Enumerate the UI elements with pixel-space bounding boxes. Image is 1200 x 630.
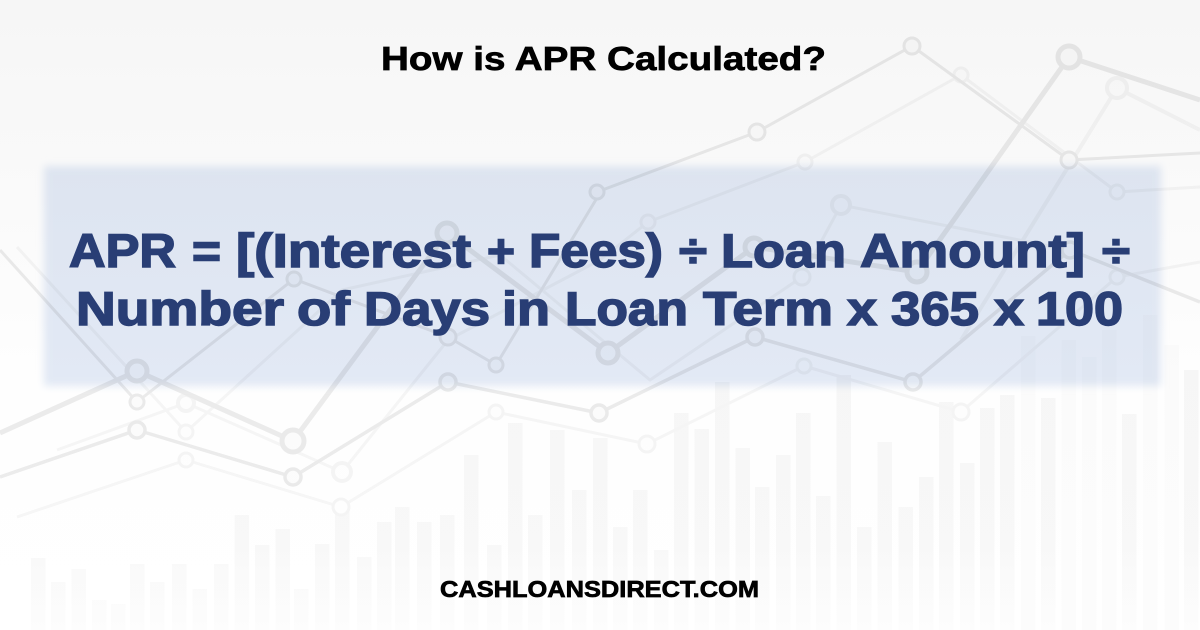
formula <box>69 224 1130 335</box>
formula line 1: ÷ <box>1102 224 1130 277</box>
formula line 1: + <box>487 224 515 277</box>
formula line 2: x <box>847 282 877 335</box>
formula line 2: Loan <box>565 282 688 335</box>
formula line 1: [(Interest <box>236 224 471 277</box>
formula line 1: ÷ <box>679 224 707 277</box>
background line chart: faint series <box>17 68 1200 517</box>
background bar chart <box>31 315 1198 630</box>
formula line 2: x <box>994 282 1024 335</box>
formula line 1: Loan <box>721 224 846 277</box>
formula line 1: Fees) <box>529 224 663 277</box>
formula line 2: in <box>502 282 550 335</box>
formula line 2: Number <box>76 282 284 335</box>
formula line 1: Amount] <box>860 224 1085 277</box>
formula line 1: = <box>192 224 221 277</box>
formula line 2: Days <box>364 282 490 335</box>
formula line 2: 100 <box>1036 282 1123 335</box>
title: How is APR Calculated? <box>381 40 826 77</box>
footer website: CASHLOANSDIRECT.COM <box>440 576 759 602</box>
background line chart: strong series <box>0 38 1200 485</box>
formula line 2: 365 <box>891 282 979 335</box>
formula line 2: Term <box>703 282 833 335</box>
formula line 2: of <box>297 282 350 335</box>
panel: formula highlight band <box>44 166 1161 386</box>
formula line 1: APR <box>69 224 176 277</box>
